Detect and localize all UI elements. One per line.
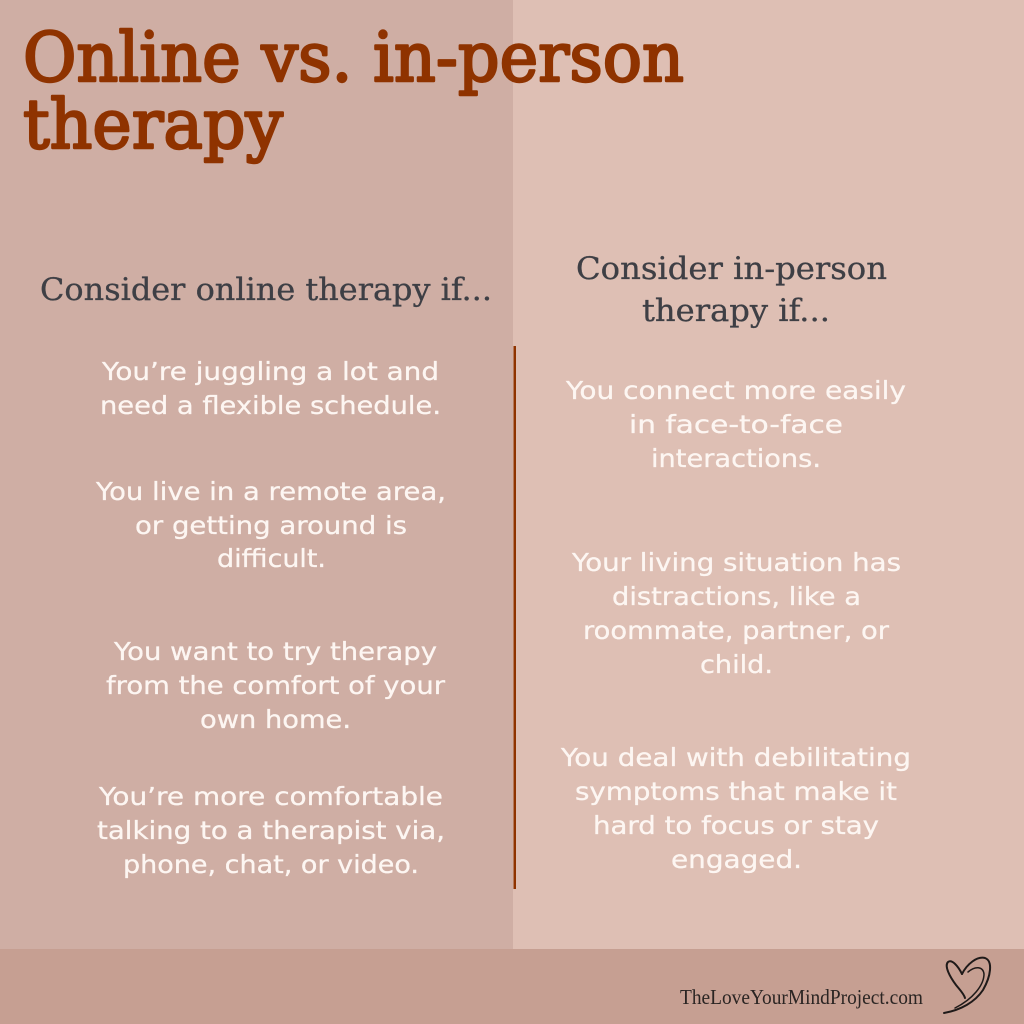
- heading: online column: Consider online therapy if...: [40, 272, 492, 308]
- title: Online vs. in-person: [23, 19, 684, 98]
- reason: debilitating symptoms: You deal with debilitating: [560, 743, 911, 772]
- reason: remote area: difficult.: [217, 544, 326, 573]
- reason: remote communication: talking to a therapist via,: [97, 816, 445, 845]
- reason: face-to-face: You connect more easily: [565, 376, 906, 405]
- panel: in-person reasons: [560, 376, 911, 874]
- reason: distractions at home: Your living situation has: [571, 548, 901, 577]
- reason: comfort of home: You want to try therapy: [113, 637, 437, 666]
- heading: in-person column: [576, 251, 887, 329]
- heading: in-person column: Consider in-person: [576, 251, 887, 287]
- reason: remote area: [95, 477, 446, 573]
- reason: debilitating symptoms: engaged.: [671, 845, 802, 874]
- footer website: TheLoveYourMindProject.com: [680, 985, 923, 1009]
- reason: remote communication: You’re more comfortable: [98, 782, 443, 811]
- reason: debilitating symptoms: hard to focus or stay: [593, 811, 879, 840]
- reason: flexible schedule: You’re juggling a lot and: [101, 357, 439, 386]
- column divider: [514, 346, 516, 889]
- reason: face-to-face: [565, 376, 906, 473]
- title: [23, 19, 684, 165]
- reason: debilitating symptoms: symptoms that make it: [575, 777, 897, 806]
- reason: remote area: You live in a remote area,: [95, 477, 446, 506]
- icon: heart logo: [944, 958, 990, 1013]
- reason: comfort of home: own home.: [200, 705, 351, 734]
- title: therapy: [23, 86, 284, 165]
- reason: face-to-face: interactions.: [651, 444, 821, 473]
- reason: remote communication: phone, chat, or video.: [123, 850, 419, 879]
- reason: debilitating symptoms: [560, 743, 911, 874]
- panel: footer band: [0, 949, 1024, 1024]
- reason: remote communication: [97, 782, 445, 879]
- reason: distractions at home: [571, 548, 901, 679]
- reason: distractions at home: child.: [700, 650, 773, 679]
- reason: comfort of home: [106, 637, 446, 734]
- panel: online reasons: [95, 357, 446, 879]
- reason: distractions at home: distractions, like a: [612, 582, 861, 611]
- reason: remote area: or getting around is: [135, 511, 407, 540]
- panel: left background: [0, 0, 513, 949]
- panel: right background: [513, 0, 1024, 949]
- reason: comfort of home: from the comfort of your: [106, 671, 446, 700]
- heading: in-person column: therapy if...: [642, 293, 830, 329]
- reason: face-to-face: in face-to-face: [629, 410, 843, 439]
- reason: flexible schedule: need a flexible schedule.: [100, 391, 441, 420]
- reason: distractions at home: roommate, partner, or: [583, 616, 890, 645]
- reason: flexible schedule: [100, 357, 441, 420]
